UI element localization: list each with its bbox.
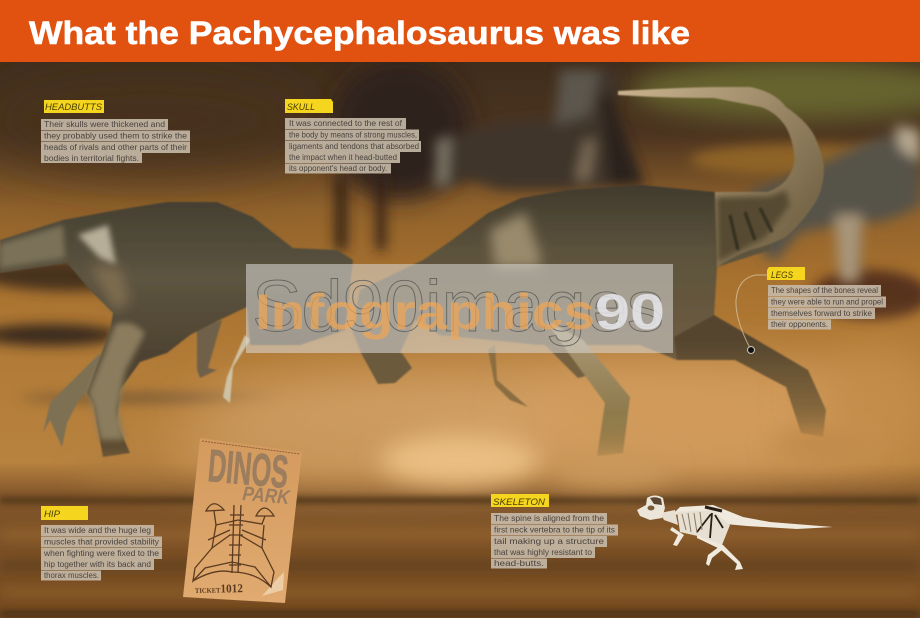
text block: skull: the body by means of strong muscles, (289, 130, 417, 140)
title: What the Pachycephalosaurus was like (29, 15, 690, 51)
ticket hip bone drawing (193, 504, 274, 587)
background dinosaurs blurred (432, 70, 920, 282)
ticket title: DINOS (206, 439, 290, 498)
text block: headbutts: bodies in territorial fights. (44, 154, 139, 163)
text block: legs (768, 285, 886, 330)
text block: legs: themselves forward to strike (771, 309, 873, 318)
text block: skull: its opponent's head or body. (289, 164, 387, 173)
text block: skull: ligaments and tendons that absorbed (289, 142, 419, 151)
text block: skeleton: tail making up a structure (494, 537, 605, 546)
leader line to leg (736, 275, 767, 354)
text block: hip: muscles that provided stability (44, 538, 159, 546)
skull (637, 496, 665, 520)
neck (660, 510, 678, 525)
text block: headbutts (41, 119, 190, 163)
text block: skull: the impact when it head-butted (289, 153, 397, 162)
tail and spine (672, 505, 833, 529)
label: legs: LEGS (771, 270, 793, 280)
tail shading (0, 225, 65, 268)
right dinosaur (352, 87, 826, 456)
far legs (488, 345, 528, 407)
watermark 90: 90 (595, 284, 665, 340)
callout: headbutts (41, 100, 190, 163)
text block: skeleton: first neck vertebra to the tip of its (494, 526, 615, 534)
callout: skeleton (491, 494, 618, 568)
text block: legs: their opponents. (771, 320, 828, 329)
ticket subtitle: PARK (242, 483, 292, 509)
text block: skeleton (491, 513, 618, 568)
label: headbutts: HEADBUTTS (45, 102, 102, 112)
head (361, 353, 412, 384)
text block: headbutts: Their skulls were thickened and (44, 120, 165, 129)
main body (0, 202, 353, 457)
left dinosaur (0, 202, 353, 457)
label: skull: SKULL (287, 102, 315, 112)
far hind leg (43, 353, 100, 447)
text block: headbutts: heads of rivals and other parts of their (44, 143, 187, 152)
callout: legs (736, 267, 886, 354)
near arm (223, 335, 250, 403)
text block: hip: when fighting were fixed to the (43, 549, 160, 558)
flank highlight (78, 225, 116, 265)
ribs and hip (677, 510, 730, 545)
label: legs (767, 267, 805, 280)
text block: legs: they were able to run and propel (771, 298, 883, 306)
label: skeleton: SKELETON (493, 497, 546, 507)
header bar (0, 0, 920, 62)
text block: skeleton: head-butts. (494, 559, 544, 568)
dark struts (697, 513, 723, 538)
callout: skull (285, 99, 421, 174)
ticket number: TICKET1012 (195, 581, 243, 596)
label: headbutts (44, 100, 104, 113)
foreground dust over feet (75, 431, 870, 486)
text block: skull: It was connected to the rest of (289, 119, 403, 128)
text block: hip: It was wide and the huge leg (44, 526, 151, 535)
text block: headbutts: they probably used them to strike the (44, 132, 188, 140)
text block: skull (285, 118, 421, 174)
back highlight (490, 212, 540, 268)
text block: hip: hip together with its back and (44, 560, 151, 569)
watermark panel (246, 264, 673, 353)
tail (618, 87, 824, 267)
watermark Infographics: Infographics (255, 284, 595, 340)
rear hind leg (674, 315, 826, 437)
text block: skeleton: The spine is aligned from the (494, 514, 605, 523)
text block: hip (41, 525, 162, 580)
text block: hip: thorax muscles. (44, 571, 99, 580)
icon: dinosaur skeleton (637, 496, 833, 570)
legs (697, 535, 743, 570)
text block: legs: The shapes of the bones reveal (771, 286, 878, 295)
thigh (88, 323, 145, 440)
neck and body (352, 185, 779, 360)
callout: hip (41, 506, 162, 580)
watermark outline logo: Sd90images (252, 267, 664, 347)
label: hip: HIP (44, 509, 60, 519)
ticket: Dinos Park (183, 438, 302, 603)
text block: skeleton: that was highly resistant to (494, 548, 593, 557)
near hind leg (545, 320, 630, 456)
